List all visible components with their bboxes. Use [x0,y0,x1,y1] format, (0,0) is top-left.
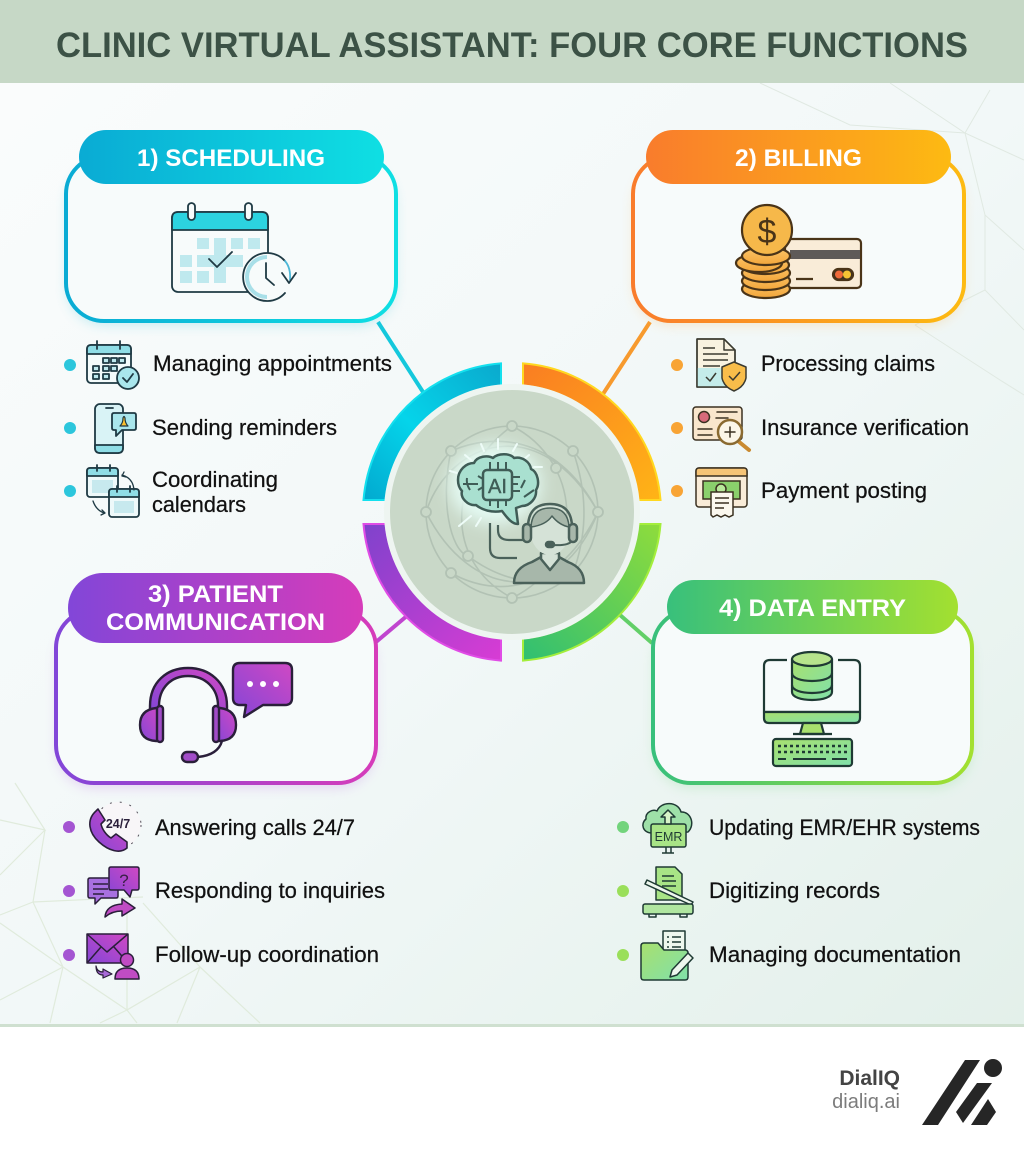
heading pill [68,573,363,643]
list: scheduling tasks [64,341,392,517]
item: digitizing records: Digitizing records [709,878,880,903]
heading pill: 1) SCHEDULING [137,145,325,172]
item: follow-up coordination [63,934,379,979]
item: updating EMR/EHR systems [617,804,980,853]
ring segment: scheduling [364,363,501,500]
item: sending reminders [64,404,337,453]
icon: coins and credit card: $ [758,213,777,251]
connector: scheduling to hub [378,322,423,392]
item: answering calls: Answering calls 24/7 [155,815,355,840]
list: data entry tasks [617,804,980,980]
item: managing appointments: Managing appointments [153,351,392,376]
ring segment: patient communication [364,524,501,661]
heading pill: 2) BILLING [735,145,862,172]
item: follow-up coordination: Follow-up coordination [155,942,379,967]
connector: data entry to hub [620,615,652,643]
network globe [421,421,603,603]
list: patient communication tasks [63,802,385,979]
item: answering calls: 24/7 [106,817,130,831]
heading pill: 3) PATIENT [148,581,283,608]
connector: billing to hub [603,322,650,394]
item: digitizing records [617,867,880,917]
footer [0,1024,1024,1154]
icon: coins and credit card [736,205,861,298]
item: coordinating calendars: Coordinating [152,467,278,492]
heading pill [79,130,384,184]
icon: AI brain: AI [488,476,507,498]
icon: headset and chat bubble [140,663,292,762]
item: payment posting: Payment posting [761,478,927,503]
panel: billing [633,130,964,325]
icon: database monitor and keyboard [764,652,860,766]
item: managing documentation [617,931,961,980]
card frame [633,156,964,321]
icon: agent connectors [490,523,523,558]
item: processing claims: Processing claims [761,351,935,376]
item: insurance verification [671,407,969,450]
item: updating EMR/EHR systems: EMR [655,830,682,844]
heading pill [667,580,958,634]
item: responding to inquiries: Responding to inquiries [155,878,385,903]
item: updating EMR/EHR systems: Updating EMR/EHR systems [709,815,980,840]
item: responding to inquiries [63,867,385,917]
icon: headset agent [514,503,584,583]
item: responding to inquiries: ? [119,871,129,890]
logo [922,1059,1002,1125]
icon: calendar with clock [172,203,296,301]
card frame [56,610,376,783]
card frame [66,156,396,321]
heading pill [646,130,951,184]
item: answering calls [63,802,355,851]
connector: patient communication to hub [376,615,408,642]
card frame [653,610,972,783]
ring segment: data entry [523,524,660,661]
hub disk [387,387,637,637]
title: CLINIC VIRTUAL ASSISTANT: FOUR CORE FUNCTIONS [56,26,968,65]
item: sending reminders: Sending reminders [152,415,337,440]
panel: data entry [653,580,972,788]
item: managing documentation: Managing documentation [709,942,961,967]
brand name: DialIQ [839,1067,900,1090]
panel: scheduling [66,130,396,325]
item: coordinating calendars [64,465,278,517]
central hub [364,363,660,661]
heading pill: 4) DATA ENTRY [719,595,906,622]
item: payment posting [671,468,927,517]
item: coordinating calendars: calendars [152,492,246,517]
brand URL: dialiq.ai [832,1091,900,1113]
item: insurance verification: Insurance verification [761,415,969,440]
title banner [0,0,1024,83]
list: billing tasks [671,339,969,517]
item: processing claims [671,339,935,391]
panel: patient communication [56,573,376,788]
ring segment: billing [523,363,660,500]
heading pill: COMMUNICATION [106,609,325,636]
item: managing appointments [64,341,392,389]
icon: AI brain [449,439,542,526]
